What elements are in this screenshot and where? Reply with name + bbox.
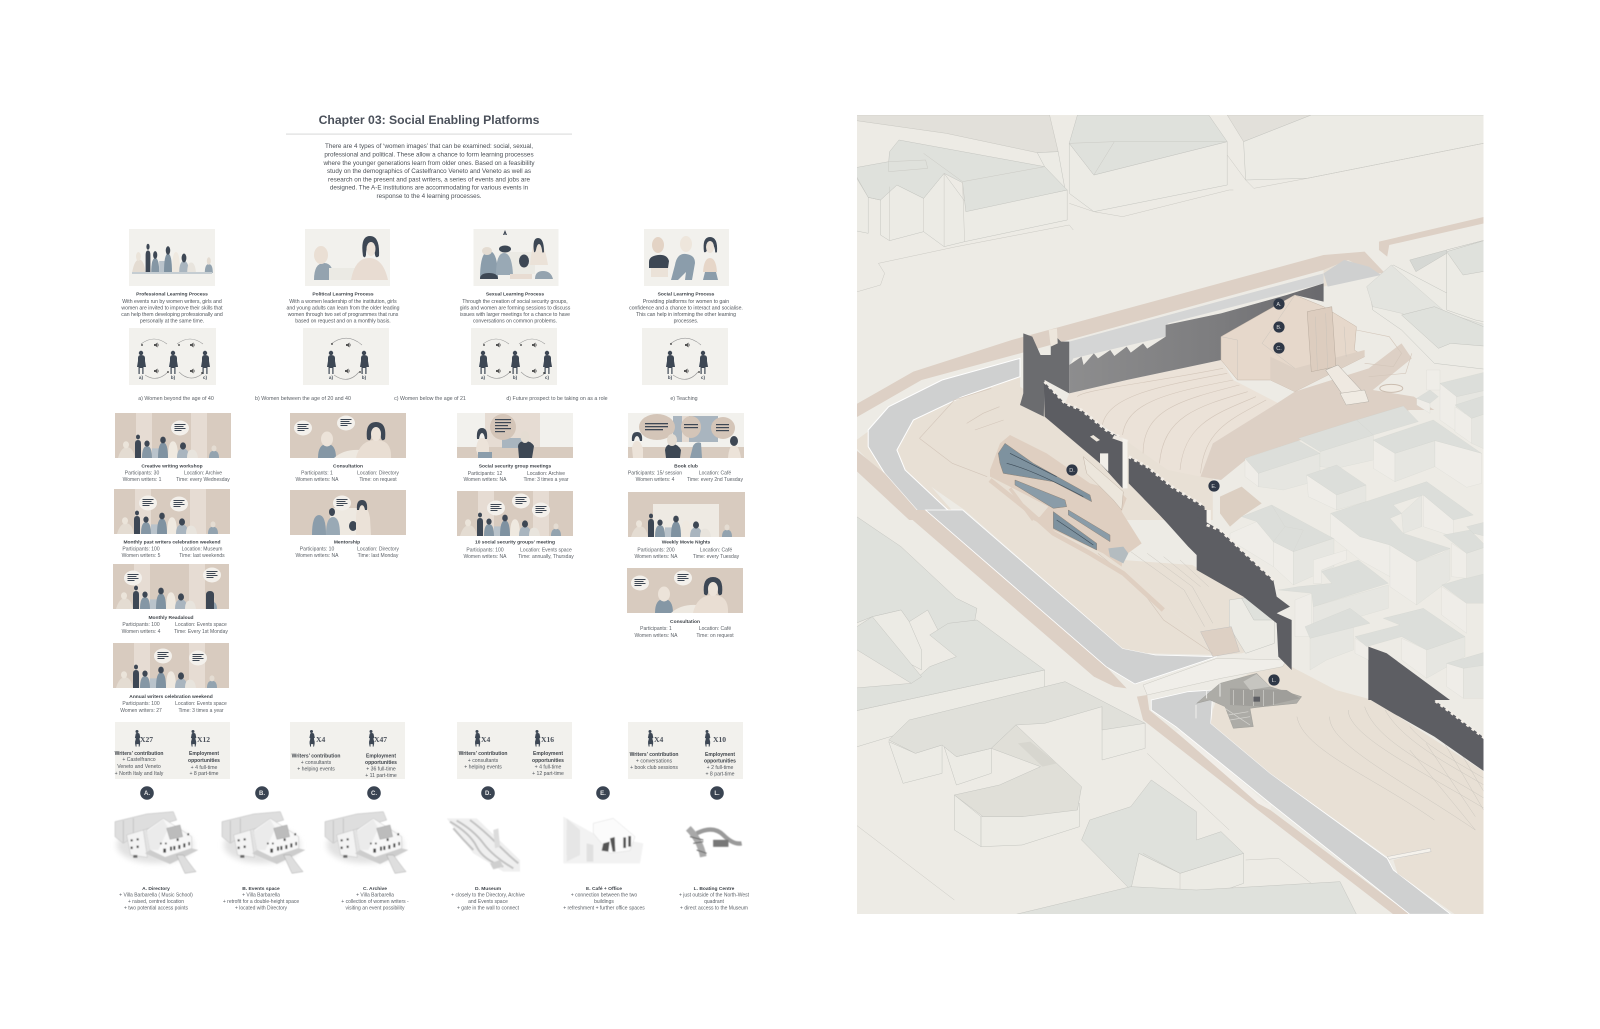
text: B Events space: B. Events space	[242, 886, 280, 892]
event: cafe consultation: Participants: 1	[640, 626, 672, 632]
isometric site map panel	[852, 115, 1492, 914]
intro paragraph: There are 4 types of ‘women images’ that can be examined: social, sexual,	[325, 143, 533, 150]
event: creative writing workshop: Time: every Wednesday	[176, 477, 230, 483]
text: political learning process: based on request and on a monthly basis.	[295, 318, 391, 324]
south courtyard terraces	[1098, 552, 1274, 657]
marker C	[1273, 342, 1285, 354]
panel: social totals: + conversations	[636, 758, 672, 764]
illustration: social learning	[644, 229, 729, 286]
event: 10 social security groups meeting: 10 social security groups' meeting	[475, 540, 555, 546]
diagram: teaching exchange	[642, 328, 728, 385]
intro paragraph: where the younger generations learn from older ones. Based on a feasibility	[322, 160, 535, 167]
event: mentorship: Time: last Monday	[358, 553, 399, 559]
text: L Boating Centre	[679, 886, 750, 912]
L-shaped block	[1278, 550, 1388, 637]
right edge blocks	[1417, 370, 1487, 698]
pyramid roof block	[1307, 465, 1366, 510]
text: D Museum: + closely to the Directory, Archive	[451, 892, 525, 898]
intro paragraph	[322, 143, 535, 200]
icon: directory villa	[115, 812, 198, 873]
legend row: e) Teaching	[670, 396, 698, 402]
event: social security group meetings: Participants: 12	[468, 471, 502, 477]
event: consultation: Time: on request	[359, 477, 397, 483]
marker L	[1268, 674, 1280, 686]
panel: professional totals	[115, 722, 230, 779]
event: 10 social security groups meeting: Time: annually, Thursday	[518, 554, 574, 560]
panel: political totals: + consultants	[301, 760, 332, 766]
icon: archive villa	[325, 812, 408, 873]
illustration: sexual learning	[474, 229, 558, 286]
event: consultation: Location: Directory	[357, 470, 399, 476]
event: cafe consultation: Time: on request	[696, 633, 734, 639]
panel: sexual totals	[457, 722, 572, 779]
event: cafe consultation: Location: Café	[699, 626, 731, 632]
text: A Directory: + two potential access points	[124, 906, 189, 912]
diagram: teaching exchange: c)	[701, 375, 705, 380]
boating centre on site	[1196, 673, 1302, 728]
event: consultation: Women writers: NA	[296, 477, 339, 483]
legend row	[138, 396, 698, 402]
panel: sexual totals: + 12 part-time	[532, 771, 564, 777]
event: book club: Time: every 2nd Tuesday	[687, 477, 743, 483]
diagram: three-way exchange a b c	[129, 328, 216, 385]
panel: political totals: + 36 full-time	[366, 766, 396, 772]
event: weekly movie nights: Participants: 200	[637, 548, 675, 554]
event: monthly readaloud	[113, 564, 229, 635]
panel: professional totals: X12	[197, 735, 210, 744]
museum on the hillside	[990, 435, 1163, 610]
panel: sexual totals: + helping events	[464, 764, 502, 770]
panel: political totals: X4	[316, 735, 325, 744]
text: political learning process: women through two set of programmes that runs	[288, 312, 399, 318]
event: consultation: Participants: 1	[301, 470, 333, 476]
event: creative writing workshop	[115, 413, 231, 483]
panel: social totals: + 8 part-time	[706, 772, 735, 778]
event: social security group meetings: Women writers: NA	[464, 477, 507, 483]
text: political learning process	[287, 292, 400, 324]
panel: social totals: + book club sessions	[630, 765, 678, 771]
text: A Directory: + raised, centred location	[128, 899, 184, 905]
event: 10 social security groups meeting: Participants: 100	[466, 548, 504, 554]
panel: sexual totals: + 4 full-time	[535, 764, 561, 770]
panel: professional totals: + 8 part-time	[190, 771, 219, 777]
event: cafe consultation	[627, 568, 743, 639]
event: weekly movie nights: Women writers: NA	[635, 554, 678, 560]
event: monthly readaloud: Women writers: 4	[122, 629, 161, 635]
ring road and pavement	[852, 215, 1492, 520]
marker L: L.	[1272, 678, 1277, 684]
diagram: teaching exchange: b)	[668, 375, 673, 380]
event: monthly past writers celebration weekend: Time: last weekends	[179, 553, 225, 559]
text: E Cafe and Office: + connection between the two	[571, 892, 637, 898]
panel: social totals: X4	[654, 735, 663, 744]
lower blocks	[1305, 608, 1465, 678]
marker E: E.	[1211, 484, 1217, 490]
text: C Archive: + Villa Barbarella	[356, 892, 394, 898]
marker C: C.	[1276, 346, 1282, 352]
institution markers A to L: B.	[259, 791, 265, 797]
marker D: D.	[1069, 468, 1075, 474]
event: monthly past writers celebration weekend: Women writers: 5	[122, 553, 161, 559]
illustration: political learning	[305, 229, 390, 286]
text: C Archive	[341, 886, 409, 912]
event: creative writing workshop: Participants: 30	[125, 470, 159, 476]
panel: professional totals: Veneto and Veneto	[117, 764, 161, 770]
event: cafe consultation: Consultation	[670, 619, 700, 625]
marker A	[1273, 298, 1285, 310]
event: book club: Book club	[674, 464, 698, 470]
event: creative writing workshop: Location: Archive	[184, 470, 222, 476]
city wall	[1020, 273, 1324, 523]
text: sexual learning process: Sexual Learning Process	[486, 292, 544, 298]
event: creative writing workshop: Creative writing workshop	[141, 464, 203, 470]
marker B: B.	[1276, 325, 1282, 331]
text: professional learning process: women are invited to improve their skills that	[121, 306, 223, 312]
event: social security group meetings: Location: Archive	[527, 471, 565, 477]
panel: professional totals: + Castelfranco	[122, 757, 156, 763]
text: C Archive: C. Archive	[363, 886, 387, 892]
text: social learning process	[629, 292, 743, 324]
panel: sexual totals: + consultants	[468, 758, 499, 764]
event: mentorship: Location: Directory	[357, 546, 399, 552]
summary panels: contributions and employment	[115, 722, 743, 779]
event: mentorship: Participants: 10	[300, 546, 334, 552]
panel: political totals: Writers' contribution	[292, 754, 340, 760]
event: weekly movie nights: Weekly Movie Nights	[662, 540, 711, 546]
panel: social totals	[628, 722, 743, 779]
event: annual writers celebration weekend: Participants: 100	[122, 701, 160, 707]
panel: learning process illustrations	[129, 229, 729, 286]
panel: social totals: opportunities	[704, 758, 736, 764]
intro paragraph: study on the demographics of Castelfranco Veneto and Veneto as well as	[327, 168, 531, 175]
text: social learning process: Social Learning Process	[658, 292, 715, 298]
institution markers A to L	[140, 786, 724, 800]
panel: political totals: Employment	[366, 754, 396, 760]
event: consultation: Consultation	[333, 464, 363, 470]
event: annual writers celebration weekend: Location: Events space	[175, 701, 227, 707]
event column: social	[627, 413, 745, 639]
text: B Events space: + located with Directory	[235, 906, 288, 912]
text: political learning process: Political Learning Process	[312, 292, 374, 298]
panel: professional totals: Writers' contribution	[115, 751, 163, 757]
east-side city blocks	[1197, 370, 1487, 700]
event: annual writers celebration weekend: Time: 3 times a year	[178, 708, 224, 714]
text: B Events space	[223, 886, 299, 912]
event: book club	[628, 413, 744, 483]
intro paragraph: research on the present and past writers, a series of events and jobs are	[328, 176, 530, 184]
panel: professional totals: X27	[140, 735, 153, 744]
event: mentorship	[290, 490, 406, 559]
text: L Boating Centre: + just outside of the North-West	[679, 892, 750, 898]
institution markers A to L: L.	[714, 791, 720, 797]
exchange diagrams	[129, 328, 728, 385]
text: E Cafe and Office: E. Café + Office	[586, 886, 622, 892]
legend row: a) Women beyond the age of 40	[138, 396, 214, 402]
block row one	[1245, 406, 1482, 490]
event: book club: Women writers: 4	[636, 477, 675, 483]
event: weekly movie nights: Location: Café	[700, 548, 732, 554]
event: social security group meetings: Social security group meetings	[479, 464, 552, 470]
title: Chapter 03: Social Enabling Platforms	[319, 113, 540, 127]
panel: political totals: + helping events	[297, 766, 335, 772]
east wall south segment	[1155, 510, 1492, 777]
panel: professional totals: + North Italy and Italy	[115, 771, 164, 777]
panel: social totals: Writers' contribution	[630, 752, 678, 758]
institution markers A to L: C.	[371, 791, 377, 797]
intro paragraph: response to the 4 learning processes.	[376, 193, 482, 200]
panel: sexual totals: opportunities	[532, 758, 564, 764]
text: D Museum	[451, 886, 525, 912]
institution markers A to L: E.	[600, 791, 606, 797]
panel: social totals: Employment	[705, 752, 735, 758]
text: sexual learning process	[460, 292, 571, 324]
text: L Boating Centre: + direct access to the Museum	[680, 906, 748, 912]
north-east buildings	[1367, 238, 1492, 370]
text: A Directory	[119, 886, 193, 912]
text: E Cafe and Office: + refreshment + further office spaces	[563, 906, 645, 912]
text: sexual learning process: conversations on common problems.	[473, 318, 557, 324]
legend row: d) Future prospect to be taking on as a role	[506, 396, 608, 402]
event: weekly movie nights	[628, 492, 745, 560]
text: C Archive: + collection of women writers -	[341, 899, 409, 905]
text: B Events space: + Villa Barbarella	[242, 892, 280, 898]
event: monthly readaloud: Participants: 100	[122, 622, 160, 628]
plaza	[1220, 487, 1262, 527]
text: political learning process: With a women leadership of the institution, girls	[289, 299, 397, 305]
panel: professional totals: + 4 full-time	[191, 765, 217, 771]
event: 10 social security groups meeting: Women writers: NA	[464, 554, 507, 560]
event: 10 social security groups meeting	[457, 491, 574, 560]
text: sexual learning process: Through the creation of social security groups,	[462, 299, 568, 305]
legend row: b) Women between the age of 20 and 40	[255, 396, 351, 402]
event: book club: Location: Café	[699, 470, 731, 476]
panel: sexual totals: X16	[541, 735, 554, 744]
event: mentorship: Women writers: NA	[296, 553, 339, 559]
institution descriptions	[119, 886, 750, 912]
courtyard complex	[1331, 482, 1473, 605]
text: sexual learning process: girls and women are forming sessions to discuss	[460, 306, 571, 312]
intro paragraph: designed. The A-E institutions are accommodating for various events in	[330, 184, 529, 192]
marker E	[1208, 480, 1220, 492]
event: creative writing workshop: Women writers: 1	[123, 477, 162, 483]
panel: social totals: + 2 full-time	[707, 765, 733, 771]
panel: social totals: X10	[713, 735, 726, 744]
marker A: A.	[1276, 302, 1282, 308]
diagram: two-way exchange a b	[303, 328, 389, 385]
panel: political totals: X47	[374, 735, 387, 744]
text: L Boating Centre: L. Boating Centre	[694, 886, 735, 892]
villa barbarella	[1221, 295, 1369, 405]
south-west buildings	[852, 513, 1356, 914]
icon: cafe and office	[563, 817, 643, 863]
event: monthly past writers celebration weekend: Monthly past writers celebration weekend	[123, 540, 221, 546]
event column: political	[290, 413, 406, 559]
marker D	[1066, 464, 1078, 476]
text: sexual learning process: issues with larger meetings for a chance to have	[460, 312, 570, 318]
road and pavement south	[901, 510, 1492, 914]
intro paragraph: professional and political. These allow a chance to form learning processes	[324, 152, 534, 158]
text: B Events space: + retrofit for a double-height space	[223, 899, 299, 905]
text: E Cafe and Office	[563, 886, 645, 912]
map markers	[1066, 298, 1285, 686]
event: mentorship: Mentorship	[334, 540, 360, 546]
panel: sexual totals: Employment	[533, 751, 563, 757]
diagram: two-way exchange a b: b)	[362, 375, 367, 380]
event: monthly readaloud: Location: Events space	[175, 622, 227, 628]
text: political learning process: and young adults can learn from the older leading	[287, 306, 400, 312]
event: social security group meetings	[457, 413, 573, 483]
map south half	[852, 510, 1492, 914]
icon: events space villa	[222, 812, 305, 873]
text: social learning process: Providing platforms for women to gain	[643, 299, 729, 305]
courtyard terraces	[919, 330, 1434, 480]
event: book club: Participants: 15/ session	[628, 470, 682, 476]
event column: sexual	[457, 413, 574, 560]
dark wall	[1197, 517, 1450, 700]
event: annual writers celebration weekend: Women writers: 27	[120, 708, 162, 714]
event: monthly past writers celebration weekend: Participants: 100	[122, 546, 160, 552]
north-west buildings	[852, 115, 1492, 293]
legend row: c) Women below the age of 21	[394, 396, 466, 402]
panel: professional totals: Employment	[189, 751, 219, 757]
event: annual writers celebration weekend: Annual writers celebration weekend	[129, 694, 213, 700]
event: monthly readaloud: Monthly Readaloud	[148, 615, 194, 621]
text: D Museum: + gate in the wall to connect	[457, 906, 520, 912]
event: annual writers celebration weekend	[113, 643, 229, 714]
event: monthly past writers celebration weekend: Location: Museum	[182, 546, 222, 552]
event: monthly readaloud: Time: Every 1st Monday	[174, 629, 228, 635]
institution markers A to L: D.	[485, 791, 491, 797]
diagram: two-way exchange a b: a)	[329, 375, 333, 380]
hip roof block	[1230, 505, 1334, 585]
panel: political totals	[290, 722, 405, 779]
event: cafe consultation: Women writers: NA	[635, 633, 678, 639]
map north half	[852, 115, 1492, 523]
institution markers A to L: A.	[144, 791, 150, 797]
marker B	[1273, 321, 1285, 333]
event: social security group meetings: Time: 3 times a year	[523, 477, 569, 483]
diagram: three-way exchange future	[471, 328, 557, 385]
panel: professional totals: opportunities	[188, 758, 220, 764]
text: C Archive: visiting an event possibility	[346, 906, 405, 912]
text: professional learning process: can help them developing professionally and	[121, 312, 223, 318]
text: professional learning process	[121, 292, 223, 324]
panel: sexual totals: Writers' contribution	[459, 751, 507, 757]
text: E Cafe and Office: buildings	[594, 899, 614, 905]
text: A Directory: A. Directory	[142, 886, 170, 892]
panel: political totals: + 11 part-time	[365, 773, 397, 779]
text: D Museum: and Events space	[468, 899, 508, 905]
event: monthly past writers celebration weekend	[114, 489, 230, 559]
text: professional learning process: With events run by women writers, girls and	[122, 299, 222, 305]
icon: boating centre	[688, 828, 742, 857]
event: 10 social security groups meeting: Location: Events space	[520, 548, 572, 554]
text: social learning process: processes.	[674, 318, 698, 324]
isometric institution icons	[115, 812, 742, 873]
text: social learning process: This can help in informing the other learning	[636, 312, 736, 318]
illustration: professional learning	[129, 229, 215, 286]
process descriptions	[121, 292, 743, 324]
text: professional learning process: Professional Learning Process	[136, 292, 208, 298]
event: consultation	[290, 413, 406, 483]
text: A Directory: + Villa Barbarella ( Music School)	[119, 892, 193, 898]
text: social learning process: confidence and a chance to interact and socialise.	[629, 306, 743, 312]
text: L Boating Centre: quadrant	[704, 899, 724, 905]
panel: political totals: opportunities	[365, 760, 397, 766]
icon: museum	[447, 818, 520, 872]
text: D Museum: D. Museum	[475, 886, 502, 892]
panel: sexual totals: X4	[481, 735, 490, 744]
event: weekly movie nights: Time: every Tuesday	[693, 554, 740, 560]
event column: professional	[113, 413, 231, 714]
text: professional learning process: personally at the same time.	[140, 318, 204, 324]
